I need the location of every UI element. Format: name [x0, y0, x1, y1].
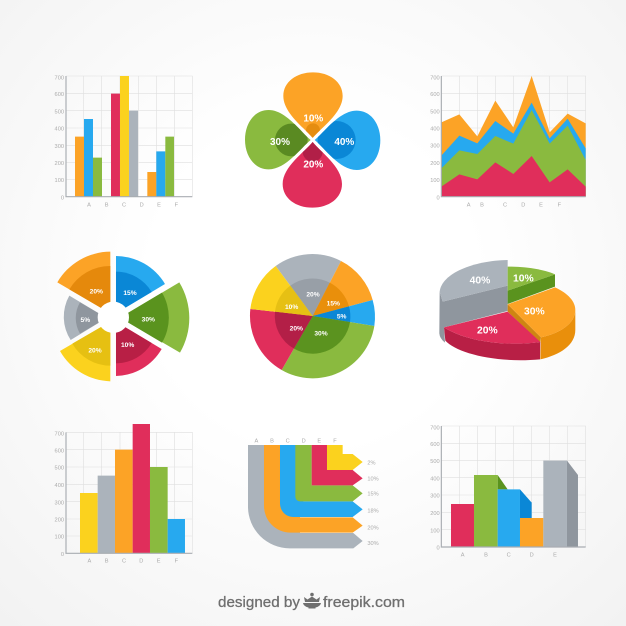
segment: green 30%: [120, 282, 189, 353]
chart: stacked area chart: E: [539, 202, 543, 208]
chart: two-ring pie: 20%: [290, 326, 303, 333]
chart: exploded donut: 20%: [88, 347, 102, 354]
chart: 3D pie: 10%: [513, 273, 534, 284]
chart: two-ring pie: [250, 254, 375, 378]
chart: bars with 3D sides: 200: [430, 511, 440, 517]
chart: nested corner arrows: E: [317, 438, 321, 444]
chart: clover petals: 10%: [303, 114, 323, 125]
chart: stacked area chart: 400: [430, 127, 440, 133]
chart: nested corner arrows: 18%: [367, 508, 379, 514]
chart: two-ring pie: 5%: [337, 313, 347, 320]
chart: bars with 3D sides: 500: [430, 459, 440, 465]
chart: stacked area chart: 0: [437, 195, 440, 201]
chart: bars with 3D sides: D: [530, 552, 534, 558]
chart: grouped bar chart: 700: [55, 75, 64, 81]
chart: exploded donut: [57, 252, 189, 381]
chart: grouped bar chart: 200: [55, 161, 64, 167]
segment: red 10%: [116, 322, 162, 376]
chart: nested corner arrows: 10%: [367, 477, 379, 483]
chart: two-ring pie: 30%: [314, 331, 328, 338]
chart: bars with 3D sides: 400: [430, 476, 440, 482]
chart: two-ring pie: 15%: [327, 300, 340, 307]
chart: grouped bar chart: E: [157, 202, 161, 208]
footer: credit line: designed by: [218, 594, 300, 611]
chart: single bar chart: 500: [55, 466, 64, 472]
chart: stacked area chart: 600: [430, 92, 440, 98]
segment: blue 15%: [116, 256, 165, 313]
chart: nested corner arrows: 30%: [367, 541, 379, 547]
chart: grouped bar chart: 600: [55, 92, 64, 98]
chart: exploded donut: 30%: [142, 317, 155, 324]
chart: clover petals: 20%: [303, 160, 323, 171]
chart: grouped bar chart: 500: [55, 109, 64, 115]
arrow: green 15%: [295, 445, 363, 501]
chart: single bar chart: B: [105, 559, 109, 565]
chart: single bar chart: 0: [61, 552, 64, 558]
chart: single bar chart: 400: [55, 483, 64, 489]
chart: exploded donut: 5%: [81, 317, 90, 324]
chart: grouped bar chart: 400: [55, 127, 64, 133]
chart: single bar chart: 700: [55, 432, 64, 438]
chart: nested corner arrows: A: [254, 438, 258, 444]
chart: stacked area chart: B: [480, 202, 484, 208]
chart: grouped bar chart: [55, 75, 192, 208]
chart: bars with 3D sides: E: [553, 552, 557, 558]
chart: single bar chart: A: [87, 559, 91, 565]
chart: nested corner arrows: [248, 438, 379, 548]
slice: red 20%: [444, 312, 540, 360]
chart: 3D pie: [439, 260, 575, 360]
chart: exploded donut: 15%: [123, 290, 137, 297]
footer: credit line: [218, 593, 405, 611]
chart: bars with 3D sides: 600: [430, 442, 440, 448]
chart: grouped bar chart: 100: [55, 178, 64, 184]
chart: nested corner arrows: B: [270, 438, 274, 444]
chart: stacked area chart: 100: [430, 178, 440, 184]
chart: exploded donut: 10%: [121, 342, 134, 349]
chart: stacked area chart: D: [521, 202, 525, 208]
segment: orange 20%: [57, 252, 110, 313]
chart: two-ring pie: 10%: [285, 304, 298, 311]
chart: two-ring pie: 20%: [306, 291, 320, 298]
chart: stacked area chart: A: [467, 202, 471, 208]
chart: clover petals: [245, 72, 380, 208]
chart: stacked area chart: 200: [430, 161, 440, 167]
petal: green 30%: [245, 110, 311, 169]
chart: single bar chart: 100: [55, 535, 64, 541]
chart: clover petals: 40%: [334, 137, 354, 148]
chart: bars with 3D sides: 700: [430, 425, 440, 431]
chart: single bar chart: C: [122, 559, 126, 565]
chart: nested corner arrows: 20%: [367, 525, 379, 531]
arrow: orange 20%: [264, 445, 363, 533]
petal: orange 10%: [283, 72, 343, 138]
chart: bars with 3D sides: A: [461, 552, 465, 558]
chart: stacked area chart: 500: [430, 109, 440, 115]
chart: 3D pie: 20%: [477, 326, 498, 337]
petal: blue 40%: [315, 111, 380, 170]
chart: single bar chart: E: [157, 559, 161, 565]
chart: single bar chart: 300: [55, 500, 64, 506]
arrow: red 10%: [312, 445, 363, 485]
chart: nested corner arrows: 2%: [367, 460, 376, 466]
chart: grouped bar chart: C: [122, 202, 126, 208]
chart: single bar chart: D: [139, 559, 143, 565]
chart: bars with 3D sides: 100: [430, 528, 440, 534]
chart: exploded donut: 20%: [90, 289, 103, 296]
icon: freepik logo: [303, 593, 321, 608]
chart: single bar chart: 200: [55, 518, 64, 524]
slice: gray 40%: [439, 260, 508, 343]
chart: nested corner arrows: F: [333, 438, 337, 444]
chart: 3D pie: 40%: [470, 276, 490, 287]
chart: 3D pie: 30%: [524, 307, 545, 318]
arrow: gray 30%: [248, 445, 363, 548]
chart: bars with 3D sides: 300: [430, 494, 440, 500]
chart: single bar chart: F: [175, 559, 179, 565]
chart: bars with 3D sides: C: [507, 552, 511, 558]
segment: gray 5%: [64, 296, 107, 340]
chart: clover petals: 30%: [270, 137, 290, 148]
chart: bars with 3D sides: 0: [437, 546, 440, 552]
chart: bars with 3D sides: [430, 425, 586, 558]
chart: stacked area chart: 700: [430, 75, 440, 81]
chart: grouped bar chart: A: [87, 202, 91, 208]
chart: stacked area chart: [430, 75, 586, 208]
chart: grouped bar chart: D: [140, 202, 144, 208]
petal: red 20%: [283, 142, 342, 208]
chart: grouped bar chart: B: [105, 202, 109, 208]
arrow: yellow 2%: [327, 445, 363, 470]
footer: credit line: freepik.com: [323, 594, 405, 611]
chart: bars with 3D sides: B: [484, 552, 488, 558]
chart: grouped bar chart: F: [175, 202, 179, 208]
chart: grouped bar chart: 300: [55, 144, 64, 150]
segment: yellow 20%: [60, 322, 110, 381]
chart: single bar chart: [55, 424, 192, 565]
chart: nested corner arrows: D: [302, 438, 306, 444]
chart: nested corner arrows: C: [286, 438, 290, 444]
slice: orange 30%: [508, 287, 575, 359]
slice: green 10%: [508, 267, 555, 304]
arrow: blue 18%: [280, 445, 363, 517]
chart: nested corner arrows: 15%: [367, 492, 379, 498]
chart: stacked area chart: 300: [430, 144, 440, 150]
chart: grouped bar chart: 0: [61, 195, 64, 201]
chart: stacked area chart: F: [558, 202, 562, 208]
chart: stacked area chart: C: [503, 202, 507, 208]
chart: single bar chart: 600: [55, 448, 64, 454]
